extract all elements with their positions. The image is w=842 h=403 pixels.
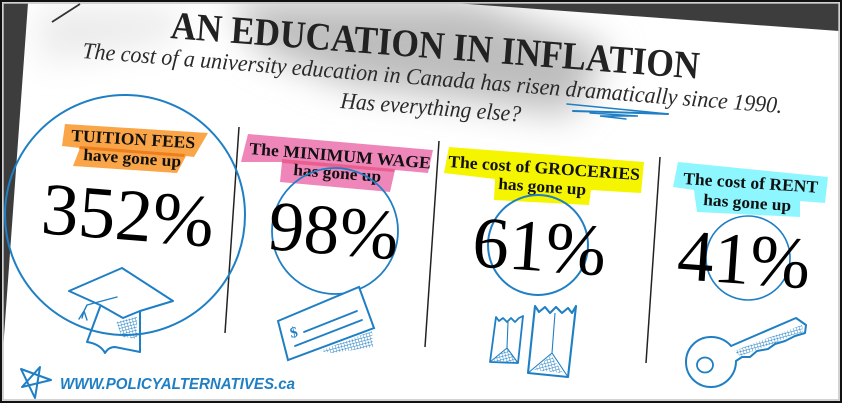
subtitle: The cost of a university education in Canada has risen dramatically since 1990. <box>82 38 783 118</box>
rent number: 41% <box>675 214 813 304</box>
groceries circle <box>488 195 588 295</box>
panel: tuition fees <box>5 95 245 353</box>
wage label highlight <box>241 134 433 192</box>
rent label <box>683 169 819 215</box>
tuition label: have gone up <box>83 145 182 171</box>
column dividers <box>225 127 660 363</box>
groceries label: The cost of GROCERIES <box>448 152 641 184</box>
icon: cheque <box>278 287 374 360</box>
wage label: has gone up <box>293 160 382 186</box>
icon: graduation cap <box>69 268 173 353</box>
pen mark <box>52 4 80 22</box>
tuition label <box>71 126 196 171</box>
icon: cheque: $ <box>289 325 300 342</box>
groceries number: 61% <box>470 201 609 291</box>
wage number: 98% <box>266 187 402 275</box>
wage circle <box>272 168 398 294</box>
underline scribble <box>567 104 668 119</box>
rent label highlight <box>673 162 828 217</box>
wage label: The MINIMUM WAGE <box>249 139 432 173</box>
tuition number: 352% <box>39 168 217 263</box>
icon: key <box>686 318 806 387</box>
groceries label <box>448 152 641 199</box>
paper shading <box>40 0 610 115</box>
icon: star <box>21 367 51 398</box>
panel: groceries <box>444 147 644 377</box>
logo: policy alternatives <box>21 367 295 398</box>
groceries label: has gone up <box>498 174 587 199</box>
rent circle <box>706 216 790 300</box>
title: AN EDUCATION IN INFLATION <box>169 4 701 88</box>
rent label: The cost of RENT <box>683 169 819 197</box>
groceries label highlight <box>444 147 644 205</box>
tuition circle <box>5 95 245 335</box>
tuition label highlight <box>62 124 208 173</box>
icon: grocery receipts <box>490 306 576 377</box>
website url: WWW.POLICYALTERNATIVES.ca <box>60 376 295 393</box>
panel: minimum wage <box>241 134 433 360</box>
subtitle: Has everything else? <box>339 88 522 127</box>
wage label <box>249 139 432 186</box>
rent label: has gone up <box>703 190 792 215</box>
panel: rent <box>673 162 828 387</box>
tuition label: TUITION FEES <box>71 126 196 152</box>
